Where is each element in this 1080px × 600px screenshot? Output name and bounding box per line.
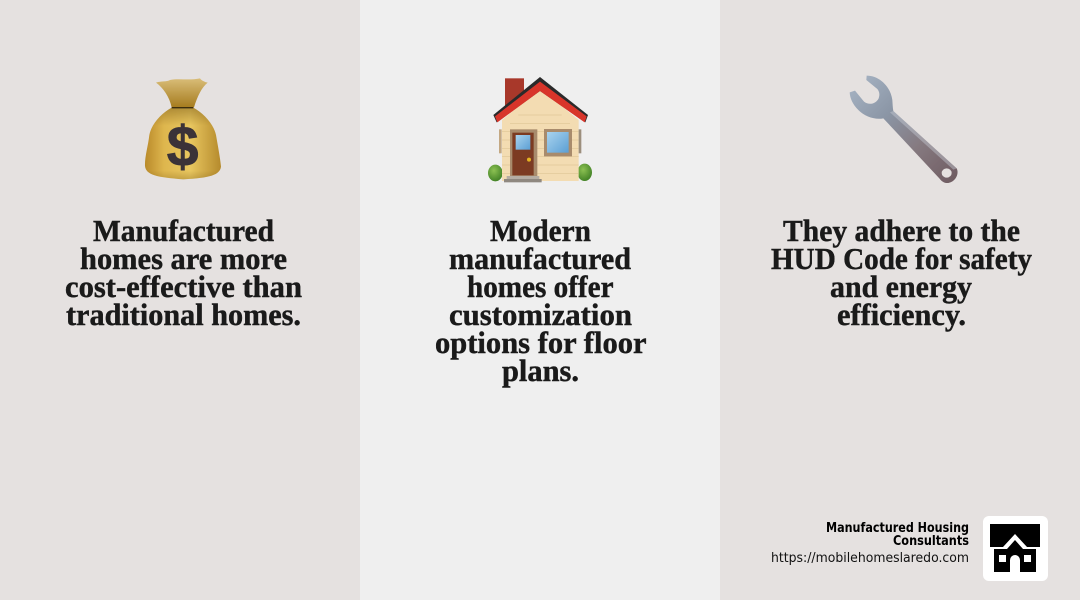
panel: customization (360, 0, 720, 600)
brand name: Manufactured Housing (826, 521, 969, 536)
heading: customization: customization (449, 297, 632, 332)
panel: HUD code (720, 0, 1080, 600)
heading: cost-effective: homes are more (80, 241, 287, 276)
heading: HUD code: efficiency. (837, 297, 966, 332)
panel: cost (0, 0, 360, 600)
heading: cost-effective: traditional homes. (66, 297, 301, 332)
heading: customization: options for floor (435, 325, 647, 360)
brand name: Consultants (893, 534, 969, 549)
heading: HUD code: and energy (830, 269, 972, 304)
icon: house (488, 77, 592, 182)
heading: customization: homes offer (467, 269, 614, 304)
heading: cost-effective: Manufactured (93, 213, 274, 248)
heading: customization: manufactured (449, 241, 631, 276)
icon: money bag (145, 78, 221, 179)
heading: cost-effective: cost-effective than (65, 269, 302, 304)
footer: brand block (771, 516, 1048, 581)
heading: HUD code: HUD Code for safety (771, 241, 1032, 276)
website url: https://mobilehomeslaredo.com (771, 551, 969, 566)
logo (983, 516, 1048, 581)
heading: customization: Modern (490, 213, 591, 248)
icon: money bag: $ (167, 116, 198, 179)
heading: HUD code: They adhere to the (783, 213, 1020, 248)
heading: customization: plans. (502, 353, 579, 388)
icon: wrench (850, 76, 958, 183)
